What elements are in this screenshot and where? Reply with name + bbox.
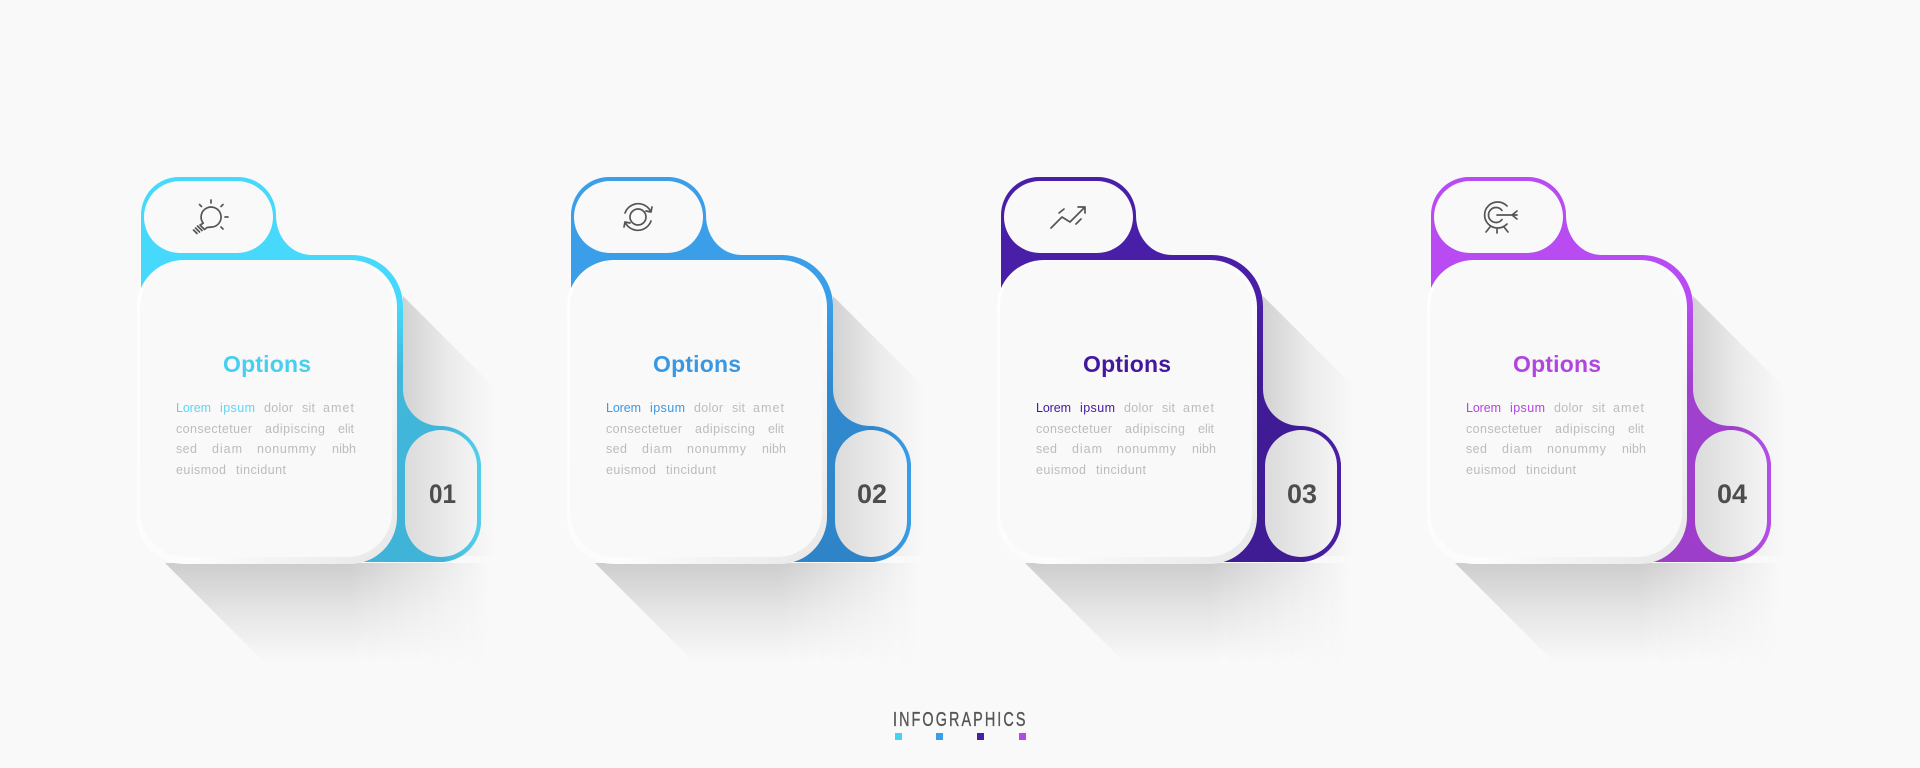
body text: euismod (606, 463, 656, 477)
panel: option 1 (137, 177, 495, 663)
body text: tincidunt (1526, 463, 1577, 477)
body text: dolor (264, 401, 293, 415)
body text: tincidunt (236, 463, 287, 477)
body text: nonummy (1117, 442, 1177, 456)
body text: Lorem (176, 401, 211, 415)
body text: nibh (1622, 442, 1646, 456)
body text (606, 401, 786, 477)
body text: nonummy (687, 442, 747, 456)
body text (176, 401, 356, 477)
body text: sed (176, 442, 197, 456)
icon: target (1485, 202, 1517, 233)
coloured frame (1431, 177, 1771, 562)
body text: consectetuer (1466, 422, 1542, 436)
body text: ipsum (220, 401, 255, 415)
heading: Options (223, 351, 311, 377)
body text: diam (1072, 442, 1102, 456)
coloured frame (141, 177, 481, 562)
body text: nonummy (1547, 442, 1607, 456)
body text: Lorem (1466, 401, 1501, 415)
body text: amet (1613, 401, 1645, 415)
body text: ipsum (1080, 401, 1115, 415)
number pill (835, 430, 907, 557)
body text: euismod (1466, 463, 1516, 477)
icon tab (574, 181, 703, 253)
heading: Options (1513, 351, 1601, 377)
body text: nibh (1192, 442, 1216, 456)
body text: consectetuer (1036, 422, 1112, 436)
long shadow (1455, 296, 1785, 663)
body text: amet (753, 401, 785, 415)
body text: sit (732, 401, 746, 415)
icon tab (144, 181, 273, 253)
long shadow (1025, 296, 1355, 663)
body text: diam (642, 442, 672, 456)
body text: adipiscing (265, 422, 325, 436)
icon: refresh cycle (624, 204, 652, 230)
body text: nonummy (257, 442, 317, 456)
panel: option 3 (997, 177, 1355, 663)
body text: elit (1198, 422, 1215, 436)
body text: tincidunt (666, 463, 717, 477)
main card (567, 260, 827, 564)
body text (1036, 401, 1216, 477)
panel: option 2 (567, 177, 925, 663)
coloured frame (571, 177, 911, 562)
icon: light bulb (194, 200, 228, 234)
icon tab (1004, 181, 1133, 253)
body text: adipiscing (695, 422, 755, 436)
main card (997, 260, 1257, 564)
number: 02 (857, 479, 887, 509)
body text: ipsum (650, 401, 685, 415)
body text: dolor (1554, 401, 1583, 415)
body text: dolor (1124, 401, 1153, 415)
body text: amet (1183, 401, 1215, 415)
body text: tincidunt (1096, 463, 1147, 477)
body text: elit (1628, 422, 1645, 436)
body text: sed (1036, 442, 1057, 456)
body text: elit (338, 422, 355, 436)
body text: ipsum (1510, 401, 1545, 415)
body text: Lorem (1036, 401, 1071, 415)
body text: euismod (176, 463, 226, 477)
body text: sit (1592, 401, 1606, 415)
body text: nibh (762, 442, 786, 456)
long shadow (595, 296, 925, 663)
icon tab (1434, 181, 1563, 253)
body text: diam (1502, 442, 1532, 456)
body text: Lorem (606, 401, 641, 415)
footer title: INFOGRAPHICS (893, 708, 1028, 731)
number pill (405, 430, 477, 557)
body text (1466, 401, 1646, 477)
body text: diam (212, 442, 242, 456)
body text: sed (606, 442, 627, 456)
footer logo (893, 708, 1028, 740)
heading: Options (653, 351, 741, 377)
main card (1427, 260, 1687, 564)
body text: dolor (694, 401, 723, 415)
body text: elit (768, 422, 785, 436)
number: 03 (1287, 479, 1317, 509)
number pill (1265, 430, 1337, 557)
long shadow (165, 296, 495, 663)
body text: adipiscing (1125, 422, 1185, 436)
icon: rising trend (1051, 207, 1085, 228)
body text: nibh (332, 442, 356, 456)
coloured frame (1001, 177, 1341, 562)
footer colour squares (895, 733, 1026, 740)
body text: consectetuer (176, 422, 252, 436)
heading: Options (1083, 351, 1171, 377)
number: 01 (429, 479, 456, 509)
panel: option 4 (1427, 177, 1785, 663)
body text: sit (302, 401, 316, 415)
number pill (1695, 430, 1767, 557)
body text: sit (1162, 401, 1176, 415)
number: 04 (1717, 479, 1747, 509)
main card (137, 260, 397, 564)
body text: amet (323, 401, 355, 415)
body text: consectetuer (606, 422, 682, 436)
body text: sed (1466, 442, 1487, 456)
body text: euismod (1036, 463, 1086, 477)
body text: adipiscing (1555, 422, 1615, 436)
